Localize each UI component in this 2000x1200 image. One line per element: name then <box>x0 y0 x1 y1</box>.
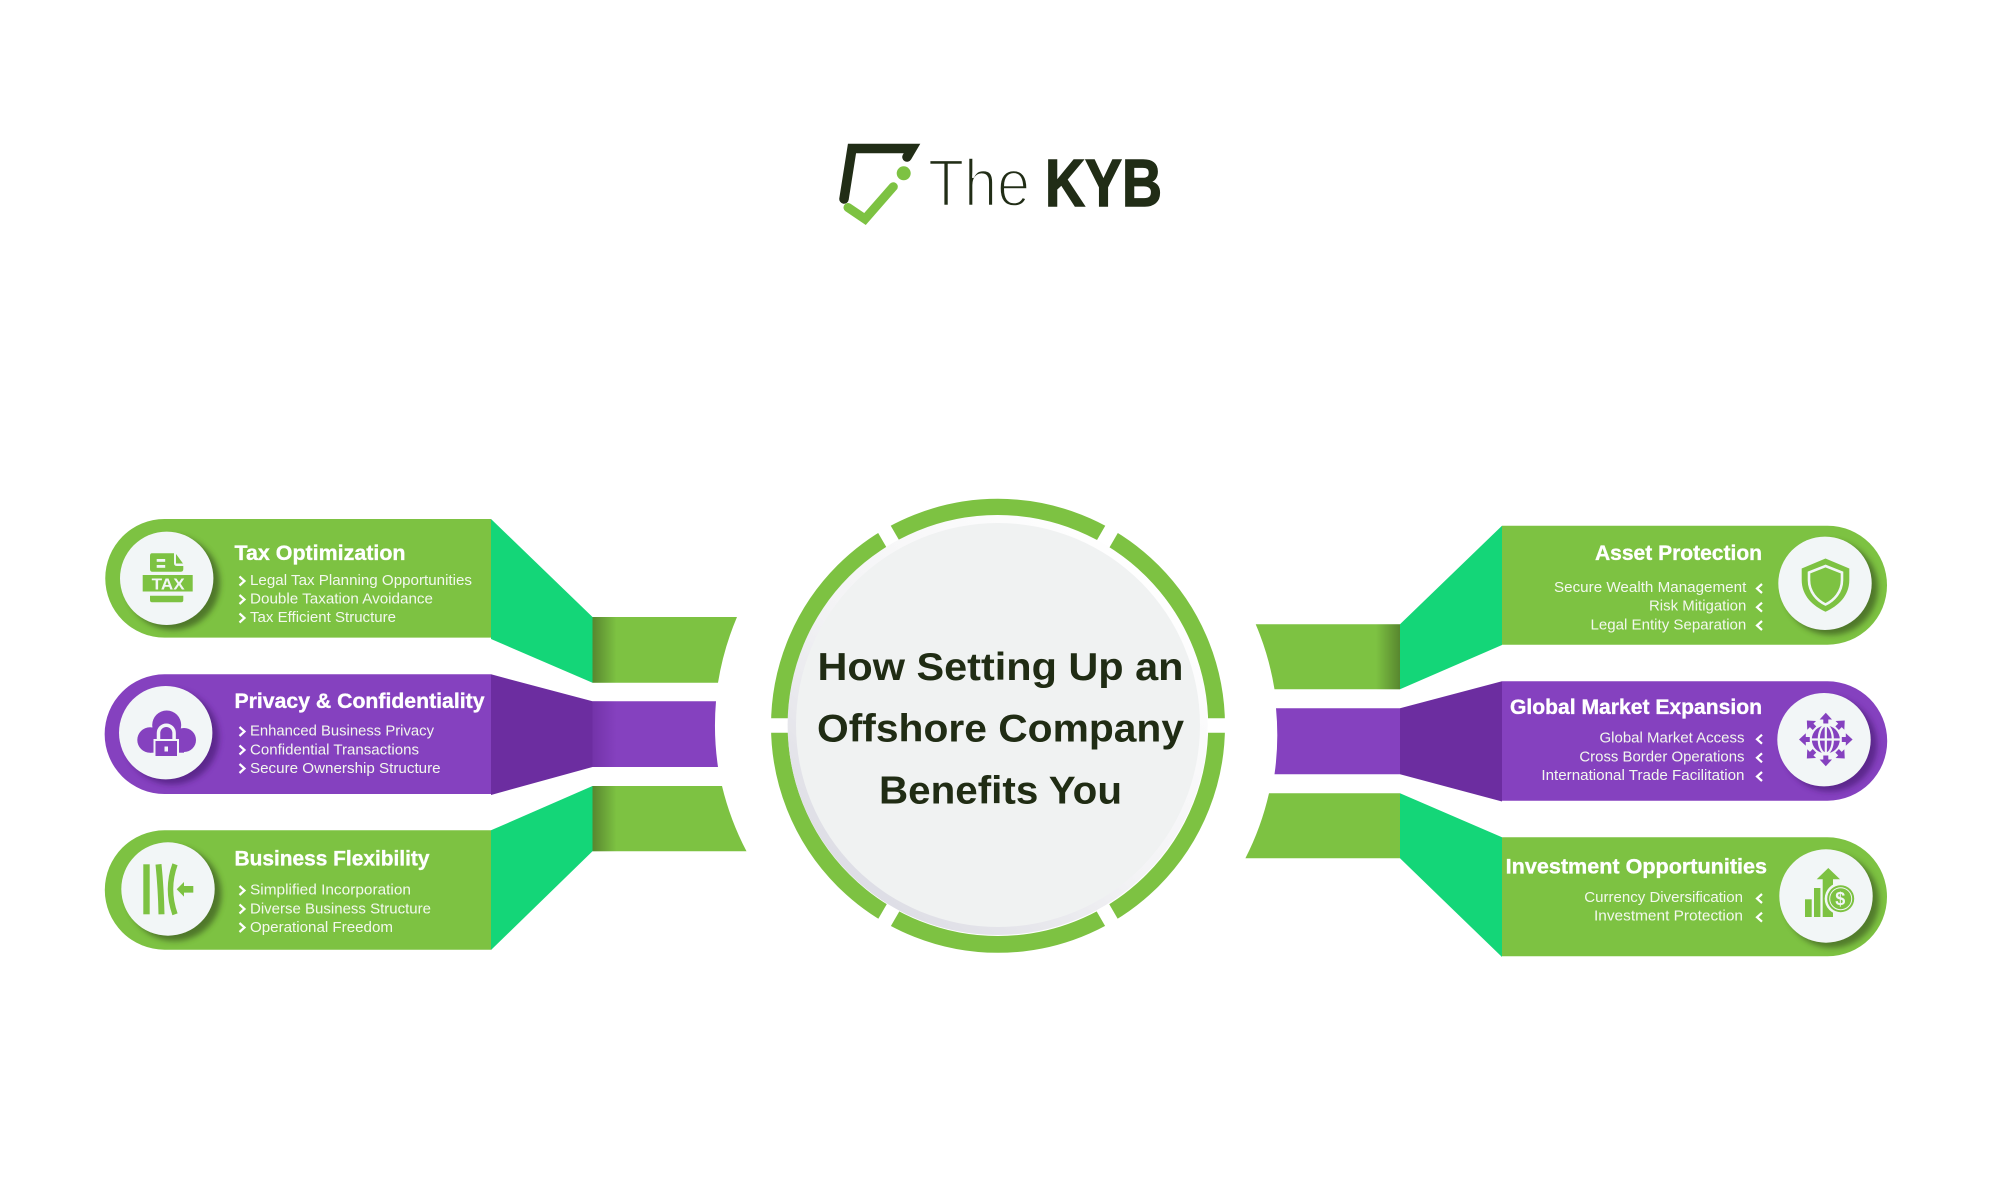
panel: Global Market Expansion <box>1274 681 1887 802</box>
connector band <box>1245 793 1502 957</box>
panel: Tax Optimization <box>105 519 737 683</box>
logo wordmark: KYB: KYB <box>1045 146 1162 221</box>
heading: Business Flexibility <box>234 848 430 871</box>
heading: Privacy & Confidentiality <box>234 690 485 713</box>
bullet list: Diverse Business Structure <box>250 900 431 917</box>
bullet list: Secure Ownership Structure <box>250 760 441 777</box>
icon: growth chart and dollar coin <box>1779 849 1879 948</box>
icon: growth chart and dollar coin: $ <box>1835 889 1845 909</box>
bullet list: Tax Efficient Structure <box>250 609 396 626</box>
panel: Business Flexibility <box>105 786 746 950</box>
logo: The KYB <box>844 146 1162 221</box>
icon: shield check mark <box>844 148 912 219</box>
icon: cloud padlock <box>119 686 219 784</box>
title <box>817 646 1184 812</box>
heading: Asset Protection <box>1595 542 1762 565</box>
connector band <box>491 674 718 795</box>
connector band <box>491 519 737 683</box>
panel: Asset Protection <box>1256 526 1887 689</box>
icon: tax document: TAX <box>152 576 185 594</box>
central disc <box>788 515 1208 935</box>
icon: tax document <box>120 532 220 630</box>
logo wordmark: The: The <box>928 146 1030 221</box>
bullet list: Simplified Incorporation <box>250 882 411 899</box>
title: How Setting Up an <box>818 646 1184 689</box>
bullet list <box>1554 579 1762 633</box>
banner <box>1502 526 1887 645</box>
connector band <box>1274 681 1502 802</box>
banner <box>105 519 491 638</box>
panel: Investment Opportunities <box>1245 793 1887 957</box>
bullet list: Legal Entity Separation <box>1590 616 1746 633</box>
bullet list <box>240 723 441 777</box>
bullet list: Secure Wealth Management <box>1554 579 1747 596</box>
bullet list <box>1584 889 1762 925</box>
connector band <box>491 786 746 950</box>
bullet list: Double Taxation Avoidance <box>250 590 433 607</box>
bullet list: Confidential Transactions <box>250 741 419 758</box>
bullet list: Legal Tax Planning Opportunities <box>250 572 472 589</box>
icon: globe with arrows <box>1777 693 1877 792</box>
heading: Tax Optimization <box>234 542 406 565</box>
connector band <box>1256 526 1502 689</box>
bullet list <box>240 882 431 936</box>
bullet list: Global Market Access <box>1600 730 1744 747</box>
panel: central circle <box>764 507 1232 944</box>
banner <box>105 830 491 950</box>
heading: Global Market Expansion <box>1510 696 1762 719</box>
heading: Investment Opportunities <box>1506 855 1767 878</box>
bullet list: Investment Protection <box>1594 908 1743 925</box>
bullet list: International Trade Facilitation <box>1541 767 1744 784</box>
green segmented ring <box>764 507 1232 944</box>
panel: Privacy & Confidentiality <box>105 674 718 795</box>
bullet list <box>240 572 472 626</box>
bullet list <box>1541 730 1762 784</box>
bullet list: Currency Diversification <box>1584 889 1743 906</box>
icon: flexible bars with arrow <box>121 842 222 941</box>
banner <box>1502 837 1887 956</box>
banner <box>105 674 491 794</box>
banner <box>1502 681 1887 801</box>
title: Offshore Company <box>817 708 1184 751</box>
title: Benefits You <box>879 769 1122 812</box>
bullet list: Operational Freedom <box>250 919 393 936</box>
bullet list: Cross Border Operations <box>1579 748 1744 765</box>
bullet list: Risk Mitigation <box>1649 598 1746 615</box>
icon: shield <box>1778 537 1878 635</box>
bullet list: Enhanced Business Privacy <box>250 723 434 740</box>
